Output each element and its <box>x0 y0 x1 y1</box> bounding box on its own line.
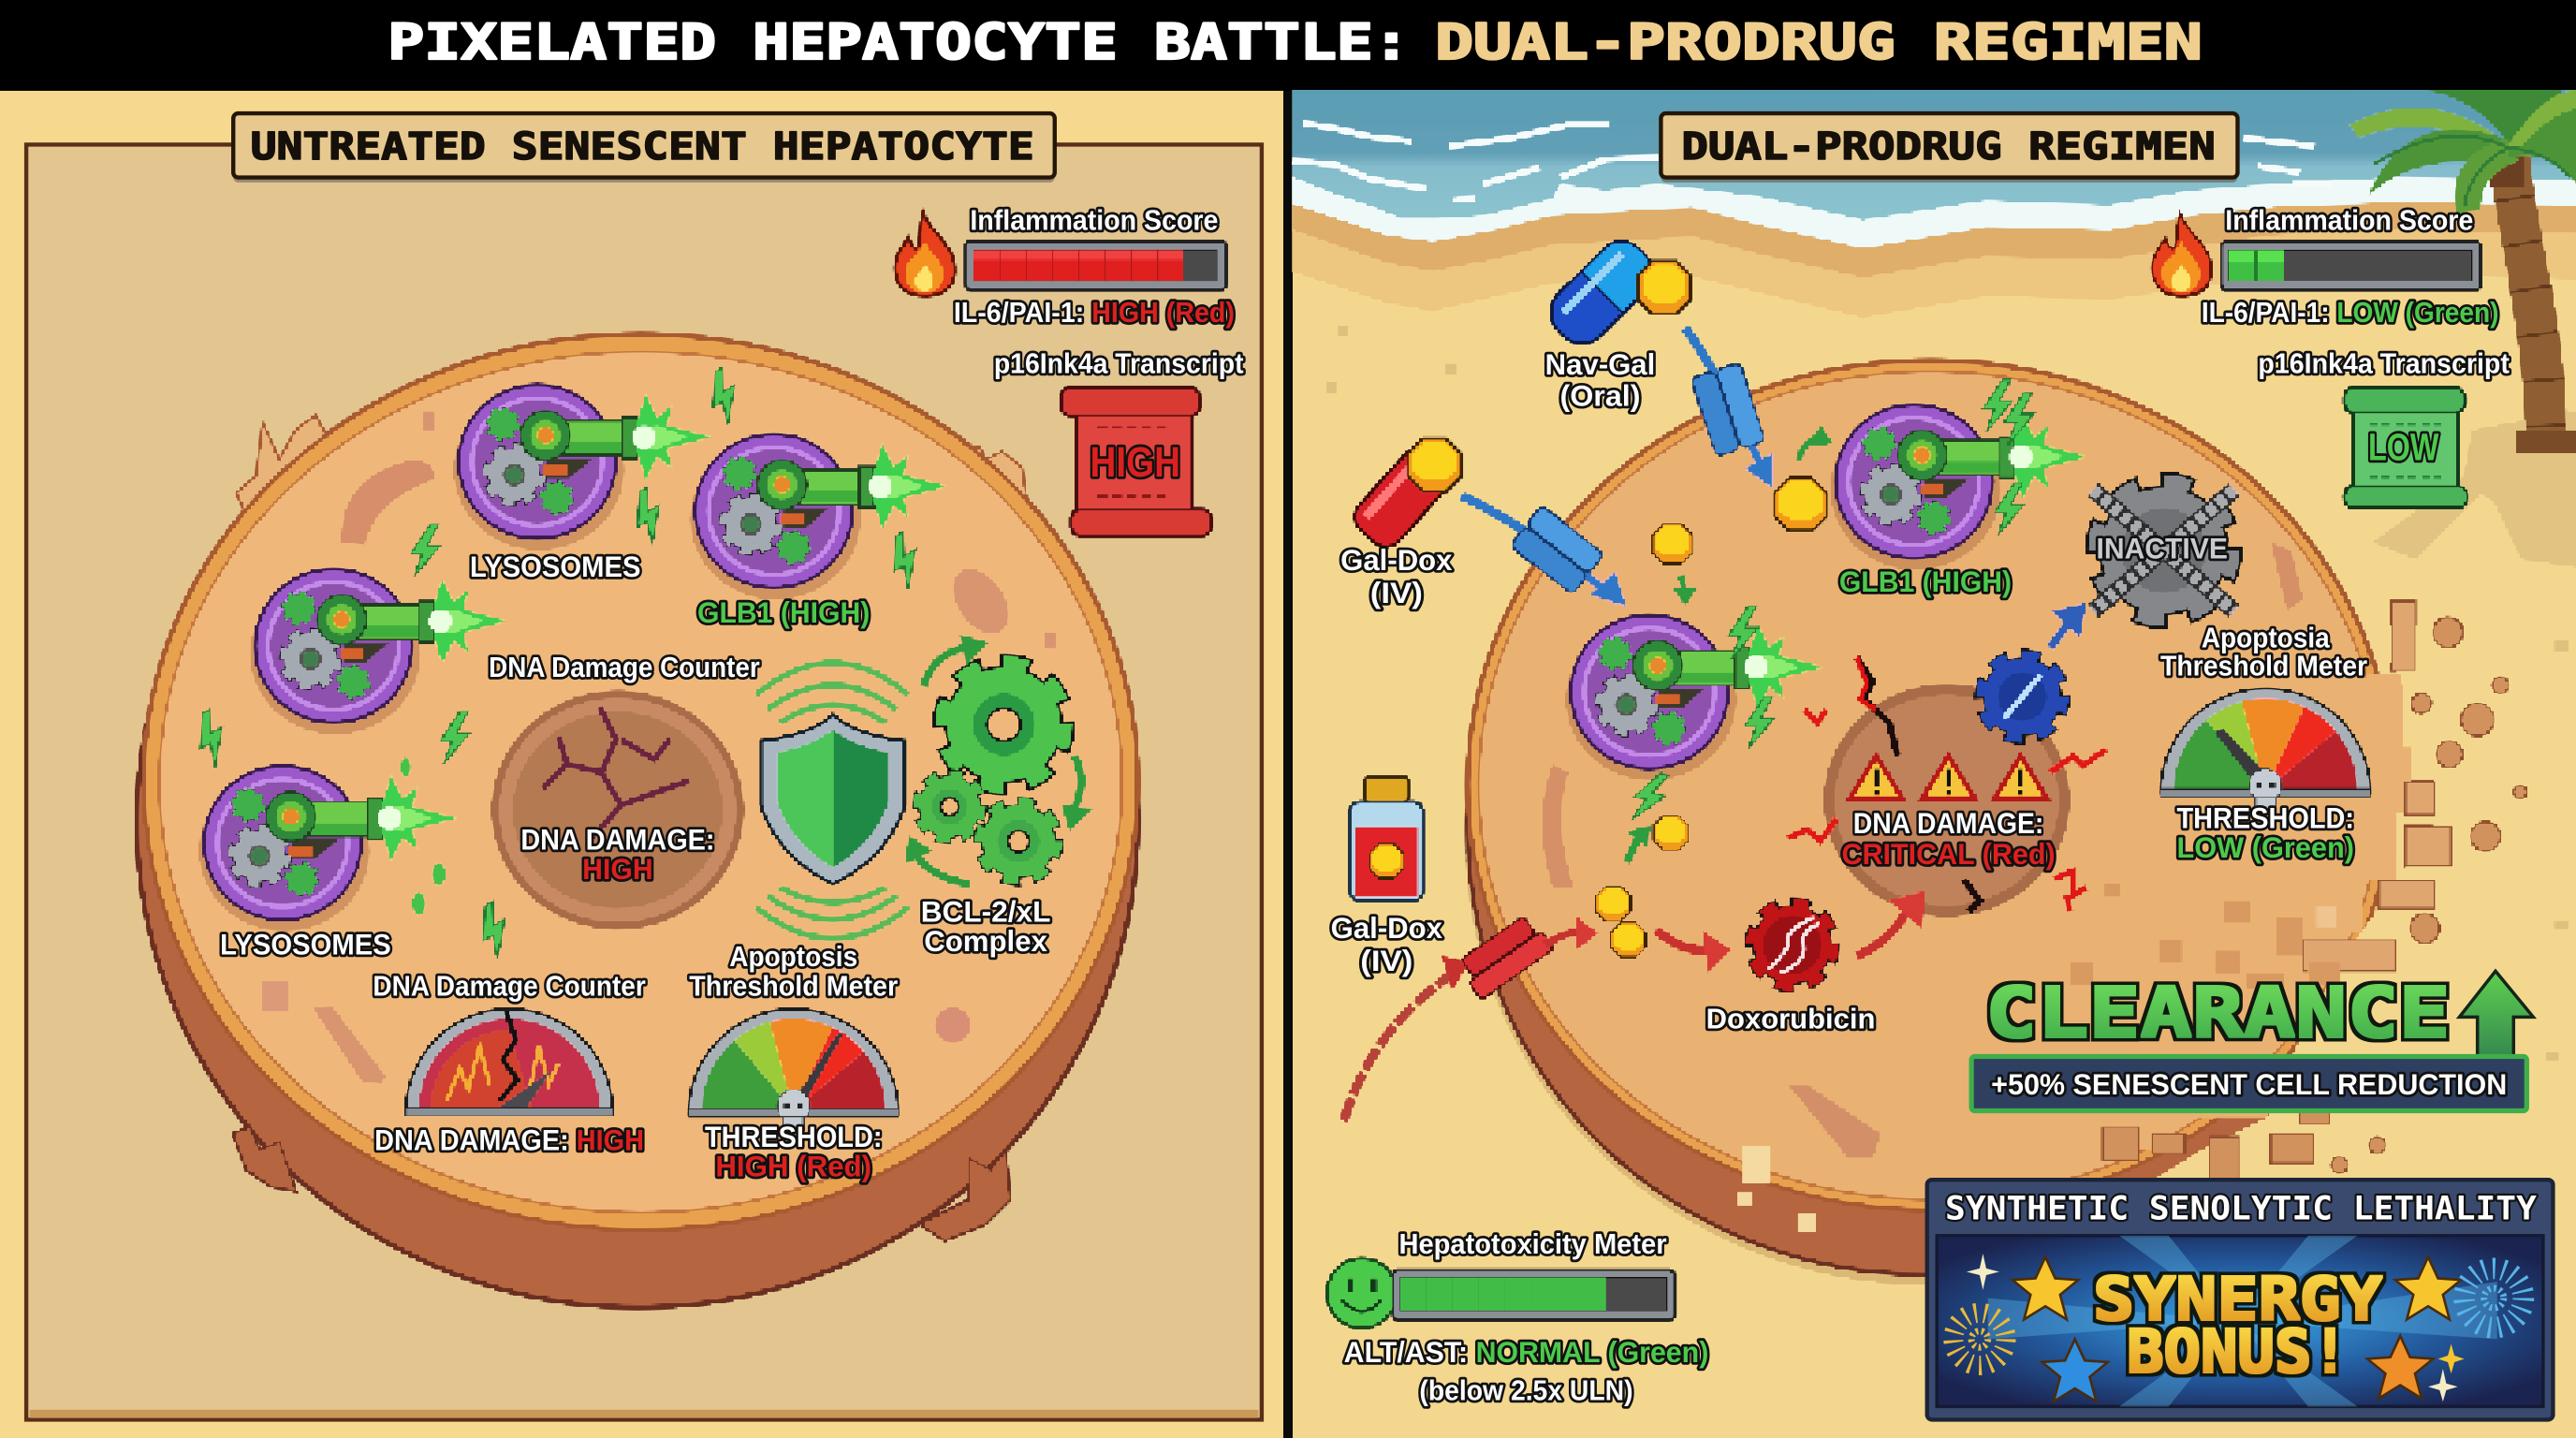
heading plate: regimen: DUAL-PRODRUG REGIMEN <box>1681 125 2216 169</box>
art layer: beach, cell and icons <box>1293 90 2576 1328</box>
hepatocyte cell body <box>135 332 1140 1310</box>
fireworks <box>1954 1269 2524 1365</box>
beach: sea and waves <box>1293 91 2576 317</box>
label: BCL-2/xL: BCL-2/xL <box>921 895 1050 929</box>
synergy bonus panel: SYNTHETIC SENOLYTIC LETHALITY <box>1945 1189 2537 1227</box>
shield <box>755 663 909 938</box>
lysosome cannon 2 <box>690 433 948 600</box>
label: IV lower: (IV) <box>1360 944 1412 977</box>
label: Gal-Dox lower: Gal-Dox <box>1331 911 1442 945</box>
label: inactive: INACTIVE <box>2097 532 2228 565</box>
lysosome cannon 3 <box>250 567 507 735</box>
title bar <box>0 0 2576 91</box>
coins and small arrows <box>1652 424 1834 607</box>
synergy bonus panel: BONUS! <box>2127 1317 2349 1387</box>
label: threshold: THRESHOLD: <box>2177 801 2354 835</box>
inflammation bar high <box>966 242 1225 289</box>
green bolts treated <box>1629 379 2034 827</box>
label: IL-6/PAI-1 low: IL-6/PAI-1: LOW (Green) <box>2202 296 2499 329</box>
label: gauge DNA damage high: DNA DAMAGE: HIGH <box>374 1123 644 1157</box>
arrow: blue gear to inactive gear <box>2050 603 2086 648</box>
center divider <box>1283 91 1293 1438</box>
label: inflammation score: Inflammation Score <box>2225 204 2473 237</box>
label: p16 transcript: p16Ink4a Transcript <box>2258 346 2510 379</box>
smiley hepatotoxicity icon <box>1327 1258 1397 1328</box>
icon: Gal-Dox vial <box>1351 777 1423 901</box>
panel: untreated senescent hepatocyte <box>0 91 1283 1438</box>
lysosome cannon treated 1 <box>1830 403 2088 570</box>
lysosome cannon 4 <box>198 764 457 932</box>
label: Gal-Dox upper: Gal-Dox <box>1340 543 1453 577</box>
label: inflammation score: Inflammation Score <box>970 204 1218 237</box>
palm shadow <box>2374 411 2576 567</box>
arrow: IV entry fading <box>1344 956 1469 1121</box>
label: threshold meter: Threshold Meter <box>2160 649 2367 682</box>
icon: blue gear <box>1983 656 2062 737</box>
label: DNA damage critical: CRITICAL (Red) <box>1841 837 2056 871</box>
clearance callout: CLEARANCE <box>1985 974 2451 1053</box>
clearance callout: +50% SENESCENT CELL REDUCTION <box>1991 1067 2507 1101</box>
green energy bolts <box>185 367 931 961</box>
hepatotoxicity bar <box>1393 1270 1674 1319</box>
synergy bonus panel <box>1927 1180 2553 1419</box>
art layer: left cell and icons <box>135 213 1225 1310</box>
red transporter <box>1456 912 1554 1000</box>
label: threshold: THRESHOLD: <box>705 1120 882 1153</box>
palm tree <box>2349 90 2576 453</box>
label: DNA damage counter: DNA Damage Counter <box>489 651 760 683</box>
heading plate: regimen <box>1661 113 2237 183</box>
label: threshold high: HIGH (Red) <box>715 1150 871 1183</box>
label: hepatotoxicity meter: Hepatotoxicity Meter <box>1398 1227 1667 1260</box>
label: apoptosis: Apoptosis <box>729 940 857 973</box>
label: scroll low: LOW <box>2368 425 2439 468</box>
gauge: DNA damage counter <box>406 1009 613 1116</box>
arrow: Gal-Dox transporter <box>1462 496 1627 607</box>
sparkles <box>1967 1254 2465 1401</box>
icon: inactive gear <box>2093 485 2234 616</box>
inflammation bar low <box>2221 242 2481 289</box>
inner frame <box>26 144 1262 1419</box>
label: lysosomes: LYSOSOMES <box>470 550 640 583</box>
label: IV upper: (IV) <box>1370 576 1423 609</box>
lysosome cannon 1 <box>453 383 711 550</box>
label: threshold meter: Threshold Meter <box>689 970 898 1003</box>
arrow: Nav-Gal transporter <box>1686 329 1773 488</box>
label: IL-6/PAI-1 high: IL-6/PAI-1: HIGH (Red) <box>954 296 1235 329</box>
BCL-2/xL gears <box>905 634 1094 884</box>
label: Nav-Gal: Nav-Gal <box>1545 347 1655 381</box>
label: ALT/AST normal: ALT/AST: NORMAL (Green) <box>1344 1335 1708 1369</box>
label: GLB1 high: GLB1 (HIGH) <box>1839 565 2012 598</box>
arrows and coins: Gal-Dox activation <box>1544 815 1732 973</box>
scroll: p16 low <box>2345 388 2467 507</box>
label: complex: Complex <box>924 924 1047 958</box>
label: DNA damage: DNA DAMAGE: <box>520 822 714 856</box>
label: DNA damage: DNA DAMAGE: <box>1853 806 2043 840</box>
title: white part: PIXELATED HEPATOCYTE BATTLE: <box>388 14 1410 71</box>
label: lysosomes lower: LYSOSOMES <box>220 928 391 961</box>
label: DNA damage counter lower: DNA Damage Counter <box>373 970 646 1003</box>
label: p16 transcript: p16Ink4a Transcript <box>994 346 1244 379</box>
gauge: apoptosis threshold low <box>2160 688 2371 810</box>
burst rays <box>1988 1236 2497 1406</box>
icon: Nav-Gal capsule <box>1540 231 1690 354</box>
icon: flame <box>896 213 955 296</box>
arrow: doxorubicin to nucleus <box>1856 890 1925 956</box>
label: below ULN: (below 2.5x ULN) <box>1419 1373 1633 1406</box>
heading plate: untreated: UNTREATED SENESCENT HEPATOCYTE <box>251 125 1034 169</box>
hepatocyte cell body treated <box>1466 359 2395 1284</box>
lysosome cannon treated 2 <box>1566 613 1823 781</box>
gauge: apoptosis threshold high <box>688 1009 899 1131</box>
icon: Gal-Dox capsule <box>1349 439 1460 553</box>
icon: doxorubicin gear <box>1752 904 1833 985</box>
clearance callout <box>1971 971 2533 1110</box>
label: DNA damage high: HIGH <box>582 852 653 886</box>
label: threshold low: LOW (Green) <box>2177 830 2354 864</box>
disintegrating cell edge <box>1327 326 2576 1191</box>
label: oral: (Oral) <box>1559 379 1640 413</box>
label: apoptosis: Apoptosia <box>2202 622 2331 654</box>
synergy bonus panel: SYNERGY <box>2093 1264 2382 1333</box>
label: GLB1 high: GLB1 (HIGH) <box>697 595 870 629</box>
heading plate: untreated <box>233 113 1055 183</box>
panel: dual-prodrug regimen <box>1293 90 2576 1438</box>
label: scroll high: HIGH <box>1090 438 1180 486</box>
icon: flame treated <box>2152 213 2211 296</box>
title: accent part: DUAL-PRODRUG REGIMEN <box>1435 14 2203 71</box>
scroll: p16 high <box>1061 388 1211 536</box>
nucleus: critical DNA damage <box>1788 657 2106 917</box>
label: doxorubicin: Doxorubicin <box>1706 1003 1875 1035</box>
nucleus: DNA damage <box>491 690 744 930</box>
star icons <box>2012 1257 2461 1401</box>
